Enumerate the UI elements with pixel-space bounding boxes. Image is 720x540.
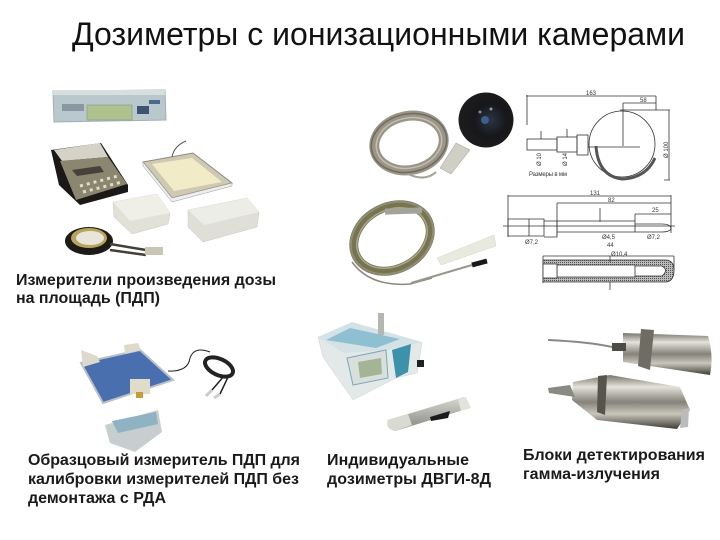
inner thimble section — [543, 260, 674, 282]
text block: gamma detection units: Блоки детектирования — [523, 447, 705, 464]
icon: small blue-grey box — [105, 410, 162, 452]
text block: surface dose meters: на площадь (ПДП) — [16, 290, 160, 307]
icon: ring detector with leads — [65, 227, 163, 255]
text block: individual dosimeters: Индивидуальные — [327, 452, 469, 469]
text block: reference meter — [28, 452, 300, 507]
dimension labels: Ø 100 — [664, 141, 670, 158]
icon: white box right — [188, 198, 259, 242]
dimension labels: Размеры в мм — [529, 172, 567, 178]
text block: gamma detection units — [523, 447, 705, 483]
dimension labels: 44 — [607, 243, 614, 249]
icon: connector — [385, 207, 422, 215]
icon: pencil dosimeter — [387, 397, 471, 431]
text block: gamma detection units: гамма-излучения — [523, 466, 660, 483]
panel: individual dosimeters photo — [318, 313, 471, 431]
dimension labels: Ø 14 — [563, 152, 569, 166]
panel: surface dose meters photo — [51, 90, 259, 255]
dimension labels: 131 — [590, 191, 601, 197]
diagram: thimble chamber drawings — [503, 191, 675, 290]
icon: black cable coil — [168, 350, 236, 398]
panel: reference meter photo — [81, 343, 236, 452]
icon: probe stem — [440, 143, 470, 174]
icon: lower detector — [548, 375, 690, 429]
panel: thimble chamber with cable — [338, 188, 496, 288]
panel: gamma detection units photo — [548, 329, 712, 429]
icon: desktop reader — [318, 313, 424, 400]
icon: cable coil olive — [338, 188, 446, 288]
icon: white box left — [113, 194, 170, 234]
text block: reference meter: демонтажа с РДА — [28, 490, 166, 507]
dimension labels: Ø4,5 — [602, 235, 616, 241]
dimension labels: 82 — [608, 198, 615, 204]
icon: probe with black tip — [411, 261, 487, 283]
icon: black sphere — [458, 92, 514, 148]
icon: flat blue chamber — [81, 343, 173, 403]
text block: surface dose meters — [16, 272, 276, 307]
diagram: spherical chamber drawing — [526, 91, 670, 180]
icon: wall-mounted meter — [53, 90, 166, 122]
text block: reference meter: калибровки измерителей ПДП без — [28, 471, 299, 488]
icon: upper detector — [548, 329, 712, 375]
text block: surface dose meters: Измерители произведения дозы — [16, 272, 276, 289]
dimension labels: Ø7,2 — [525, 240, 539, 246]
text block: individual dosimeters: дозиметры ДВГИ-8Д — [327, 471, 492, 488]
dimension labels — [529, 91, 670, 178]
dimension labels: Ø7,2 — [647, 235, 661, 241]
text block: individual dosimeters — [327, 452, 492, 488]
panel: spherical chamber with cable — [366, 92, 514, 179]
icon: cable coil grey — [366, 107, 452, 179]
icon: flat ionisation chamber — [143, 141, 232, 202]
icon: handheld meter — [51, 143, 128, 205]
icon: glass tube — [437, 235, 496, 265]
dimension labels: Ø 10 — [537, 152, 543, 166]
dimension labels: 58 — [640, 98, 647, 104]
dimension labels — [525, 191, 661, 258]
dimension labels: 163 — [586, 91, 597, 97]
dimension labels: Ø10,4 — [611, 252, 628, 258]
text block: reference meter: Образцовый измеритель ПДП для — [28, 452, 300, 469]
title: Дозиметры с ионизационными камерами — [72, 16, 685, 52]
dimension labels: 25 — [652, 208, 659, 214]
